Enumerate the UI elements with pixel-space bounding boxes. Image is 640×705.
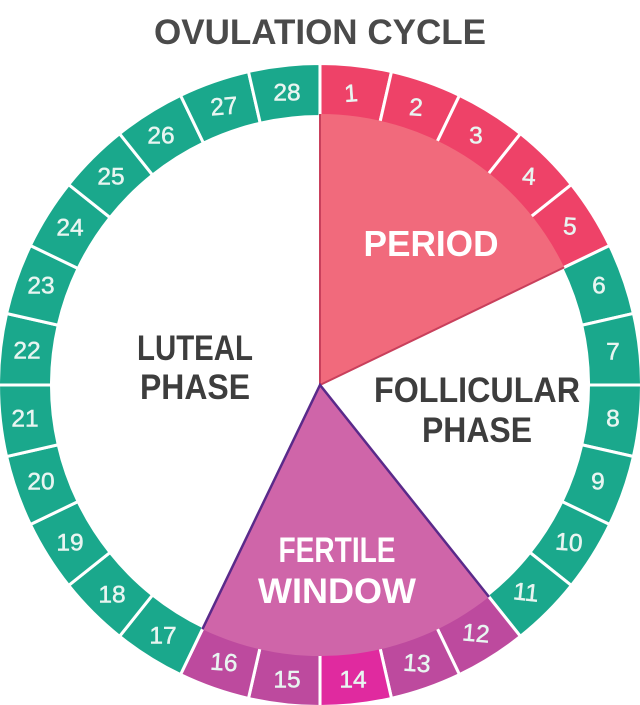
fertile window label: FERTILE	[278, 531, 396, 570]
day 22	[0, 314, 58, 385]
day 12: 12	[461, 619, 491, 649]
day 26: 26	[147, 122, 175, 150]
day 24: 24	[56, 214, 84, 242]
day 12	[427, 590, 520, 681]
day 18: 18	[98, 582, 126, 608]
fertile window label: WINDOW	[258, 572, 416, 611]
follicular phase label: FOLLICULAR	[374, 371, 580, 410]
day 2: 2	[408, 94, 424, 122]
day 11	[480, 548, 571, 641]
day 9	[559, 443, 633, 526]
day 7: 7	[606, 338, 620, 366]
day 9: 9	[591, 468, 605, 496]
luteal phase label: PHASE	[140, 368, 250, 407]
day 22: 22	[13, 338, 41, 364]
day 6	[556, 246, 640, 336]
day 28: 28	[273, 80, 301, 106]
day 25	[69, 129, 160, 222]
day 17	[116, 590, 206, 675]
period label: PERIOD	[364, 223, 498, 264]
fertile window sector	[202, 385, 489, 656]
follicular phase label: PHASE	[422, 411, 532, 450]
day 5: 5	[562, 213, 578, 241]
day 20	[0, 434, 84, 524]
day 10	[525, 499, 610, 589]
day 8	[582, 385, 640, 456]
day 13: 13	[402, 650, 431, 678]
day 20: 20	[27, 468, 55, 496]
day 6: 6	[592, 272, 606, 300]
day 17: 17	[149, 622, 177, 650]
day 10: 10	[554, 529, 583, 557]
luteal phase label: LUTEAL	[137, 329, 253, 368]
day 23	[7, 244, 81, 327]
day 7	[575, 313, 640, 396]
day 27: 27	[209, 92, 239, 122]
day 5	[525, 185, 616, 278]
day 16: 16	[209, 649, 238, 677]
day 2	[378, 72, 461, 146]
day 8: 8	[606, 406, 620, 432]
day 18	[64, 545, 157, 636]
day 19: 19	[56, 530, 84, 556]
day 19	[24, 492, 115, 585]
day 14: 14	[339, 666, 367, 694]
day 1	[320, 64, 392, 123]
day 27	[181, 64, 271, 149]
day 1: 1	[343, 80, 359, 108]
day 3	[434, 95, 524, 180]
day 26	[120, 89, 213, 180]
day 3: 3	[469, 122, 483, 150]
day 4	[483, 134, 576, 225]
period sector	[320, 114, 564, 385]
day 13	[369, 621, 459, 705]
day 24	[30, 181, 115, 271]
title: OVULATION CYCLE	[154, 13, 486, 52]
day 23: 23	[27, 272, 55, 300]
day 25: 25	[97, 164, 125, 190]
day 14	[309, 640, 392, 705]
day 15	[248, 647, 320, 705]
day 4: 4	[521, 163, 537, 191]
day 21	[0, 374, 65, 457]
day 16	[179, 624, 262, 698]
day 11: 11	[512, 578, 540, 608]
day 21: 21	[11, 406, 39, 432]
day 28	[248, 56, 331, 130]
day 15: 15	[273, 666, 301, 694]
